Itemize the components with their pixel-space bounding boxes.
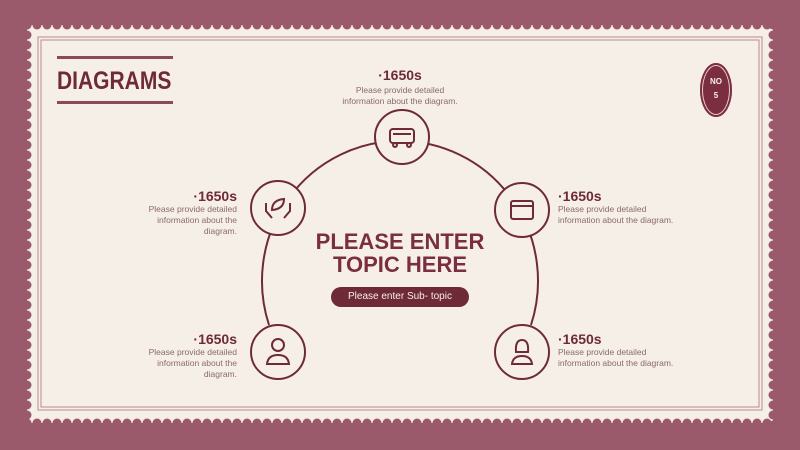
icon: bus	[375, 110, 429, 164]
title: DIAGRAMS	[57, 67, 171, 95]
subtopic pill	[331, 287, 469, 307]
item: right bottom: Please provide detailed	[558, 347, 646, 357]
item: left top: diagram.	[204, 226, 237, 236]
item: left top: information about the	[157, 215, 237, 225]
title	[57, 56, 173, 104]
item: left top	[149, 188, 237, 236]
subtopic pill: Please enter Sub- topic	[348, 291, 452, 302]
main topic: PLEASE ENTER	[316, 229, 484, 254]
item: top: information about the diagram.	[342, 96, 458, 106]
item: right bottom: ·1650s	[558, 331, 602, 347]
item: right top: Please provide detailed	[558, 204, 646, 214]
item: left bottom: ·1650s	[193, 331, 237, 347]
icon: person	[251, 325, 305, 379]
main topic	[316, 229, 484, 277]
item: top	[342, 67, 458, 106]
item: left bottom: information about the	[157, 358, 237, 368]
item: left bottom: diagram.	[204, 369, 237, 379]
item: right top: information about the diagram.	[558, 215, 673, 225]
badge: NO 5: 5	[714, 91, 718, 100]
item: top: Please provide detailed	[356, 85, 444, 95]
item: top: ·1650s	[378, 67, 422, 83]
item: right bottom: information about the diagram.	[558, 358, 673, 368]
main topic: TOPIC HERE	[333, 252, 467, 277]
badge: NO 5	[700, 63, 732, 117]
item: left bottom: Please provide detailed	[149, 347, 237, 357]
item: right top	[558, 188, 673, 225]
icon: woman	[495, 325, 549, 379]
item: right bottom	[558, 331, 673, 368]
item: left top: ·1650s	[193, 188, 237, 204]
item: left top: Please provide detailed	[149, 204, 237, 214]
item: right top: ·1650s	[558, 188, 602, 204]
icon: leaf hands	[251, 181, 305, 235]
icon: calendar	[495, 183, 549, 237]
badge: NO 5: NO	[710, 77, 722, 86]
item: left bottom	[149, 331, 237, 379]
